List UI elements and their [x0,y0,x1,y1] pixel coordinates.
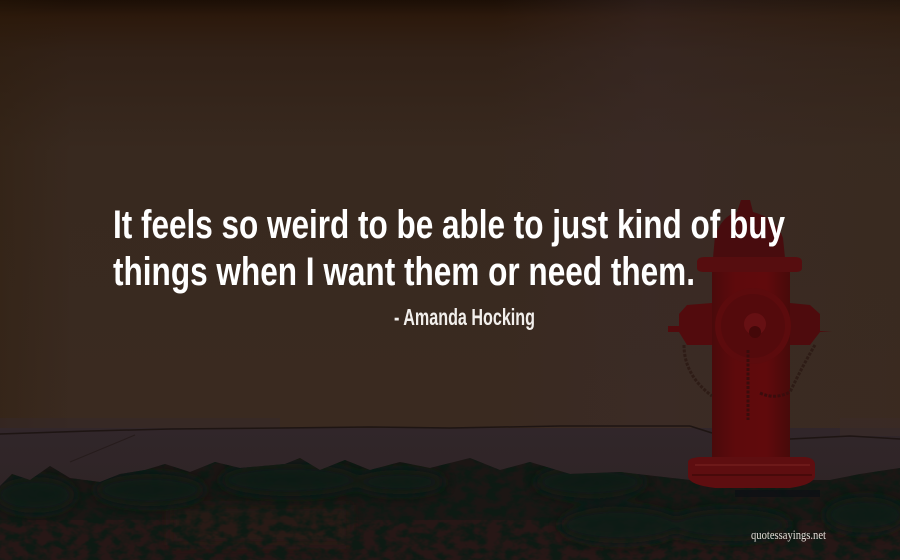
hydrant: centre cap [715,288,791,364]
hydrant: body [712,270,790,460]
hydrant: right nozzle [790,303,832,345]
icon: fire hydrant [668,200,832,497]
hydrant: chains [684,345,815,420]
background: grass and soil strip [0,456,900,560]
hydrant: dome [713,200,785,258]
author attribution: - Amanda Hocking [394,304,535,330]
hydrant: collar [697,257,802,272]
watermark: quotessayings.net [751,527,826,542]
background: sidewalk with cracks [0,418,900,498]
background: wall [0,0,900,430]
hydrant: base flange [688,457,815,488]
quote line 2: things when I want them or need them. [113,250,695,294]
hydrant: left nozzle [668,303,712,345]
quote text [113,203,786,294]
